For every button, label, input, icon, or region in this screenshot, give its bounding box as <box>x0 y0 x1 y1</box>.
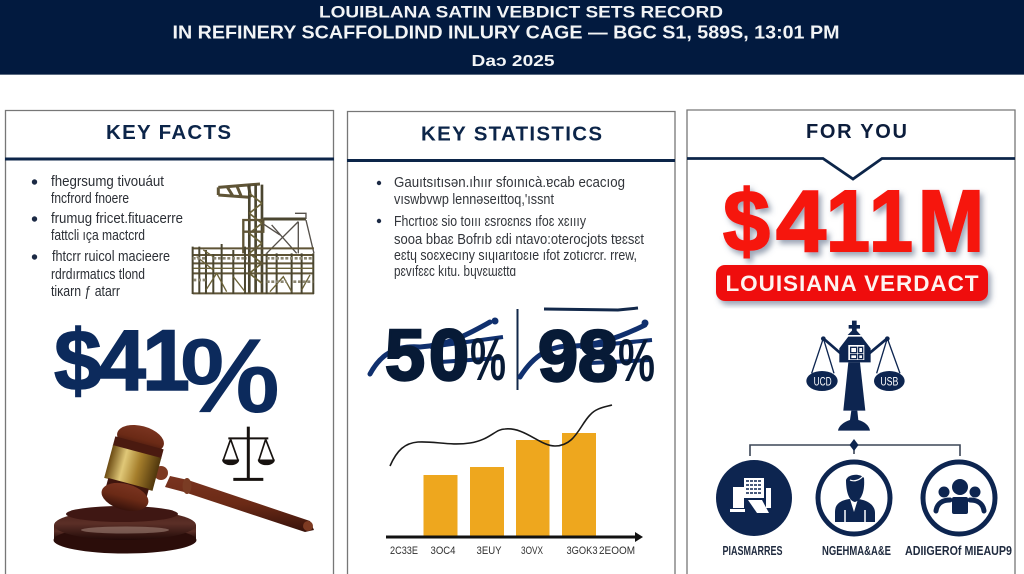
badge: louisiana verdict <box>716 265 988 301</box>
axis labels: 2C33E <box>390 545 418 557</box>
heading divider with chevron <box>687 158 1015 179</box>
gavel head <box>97 420 168 516</box>
headline figure: $411M: 1 <box>869 173 913 270</box>
bullet list: facts: fattcli ıça mactcrd <box>51 228 145 244</box>
bullet list: statistics: eɛtɥ soɛxecıny sıɥıarıtoɛıe ıfot zotıcrcr. rrew, <box>394 248 637 264</box>
axis arrow <box>386 536 636 538</box>
icon: refinery scaffolding <box>193 184 314 294</box>
axis labels: 3OC4 <box>430 545 456 557</box>
bullet list: facts: fhegrsumg tivouáut <box>51 174 164 190</box>
header date: Daɔ 2025 <box>472 53 555 70</box>
gavel handle <box>165 476 314 532</box>
panel: key statistics <box>347 112 675 574</box>
statistic: $41%: $41 <box>54 313 190 409</box>
bullet list: facts: fhtcrr ruicol macieere <box>52 249 170 265</box>
headline figure: $411M: $ <box>723 173 770 270</box>
bullet list: statistics: vıswbvwp lennəseıttoq,'ıssnt <box>394 192 554 208</box>
axis labels: 3GOK3 <box>566 545 598 557</box>
trend line <box>390 405 612 466</box>
axis labels: 3OVX <box>521 545 543 557</box>
statistic: 50% with brush swoosh <box>370 316 506 396</box>
header title line 2: IN REFINERY SCAFFOLDIND INLURY CAGE — BGC S1, 589S, 13:01 PM <box>172 22 840 42</box>
bullet list: statistics: sooa bbaɛ Bofrıb ɛdi ntavo:oteɾocjots tɐɛsɛt <box>394 232 644 248</box>
axis labels <box>390 545 635 557</box>
bullet list: statistics <box>377 175 644 280</box>
bar chart with trend line <box>386 405 643 557</box>
heading: key facts: KEY FACTS <box>106 121 231 144</box>
bullet list: facts: rdrdırmatıcs tlond <box>51 267 145 283</box>
icon: justice scale figure <box>806 321 905 431</box>
statistic: $41% <box>54 313 280 435</box>
connector <box>750 439 960 456</box>
icon: justice scale figure: USB <box>880 374 898 388</box>
statistic: 50% with brush swoosh: 50 <box>385 316 469 396</box>
header title line 1: LOUIBLANA SATIN VEBDICT SETS RECORD <box>319 2 723 22</box>
panel: for you <box>687 110 1015 574</box>
statistic: 50% with brush swoosh: % <box>470 326 506 393</box>
icon: circle with group <box>923 462 995 534</box>
bullet list: statistics: pɛvıfɛɛc kıtu. bɥvɛɯɛttɑ <box>394 264 516 280</box>
icon labels <box>722 544 1012 558</box>
bullet list: facts <box>32 174 183 300</box>
headline figure: $411M: 4 <box>776 173 826 270</box>
heading: for you: FOR YOU <box>806 121 907 143</box>
icon: small scales <box>223 427 274 479</box>
icon labels: NGEHMA&A&E <box>822 544 891 558</box>
panel: key facts <box>5 110 334 574</box>
bullet list: statistics: Fhcrtıoɛ sio toııı ɛsroɛnɛs ıfoɛ xɛıııy <box>394 214 587 230</box>
axis labels: 3EUY <box>476 545 502 557</box>
bullet list: facts: tiκarn ƒ atarr <box>51 284 120 300</box>
icon: circle with office equipment <box>716 460 792 536</box>
gavel block <box>54 525 196 539</box>
bars <box>424 433 596 537</box>
axis labels: 2EOOM <box>599 545 635 557</box>
statistic: $41%: % <box>180 317 280 435</box>
icon labels: PIASMARRES <box>722 544 782 558</box>
header banner <box>0 0 1024 75</box>
bullet list: facts: fncfrord fnoere <box>51 191 129 207</box>
statistic: 98% with brush swoosh: 98 <box>538 317 618 397</box>
statistic: 98% with brush swoosh <box>520 317 655 397</box>
icon: gavel <box>54 420 314 554</box>
headline figure: $411M: M <box>918 173 984 270</box>
divider <box>516 309 518 390</box>
icon: circle with person <box>818 462 890 534</box>
statistic: 98% with brush swoosh: % <box>618 327 655 394</box>
bullet list: statistics: Gauıtsıtısən.ıhıır sfoınıcà.ɐcab ecacıog <box>394 175 625 191</box>
bullet list: facts: frumug fricet.fituacerre <box>51 211 183 227</box>
badge: louisiana verdict: LOUISIANA VERDACT <box>726 271 979 296</box>
heading: key statistics: KEY STATISTICS <box>421 122 602 146</box>
headline figure: $411M <box>723 173 984 270</box>
brush dash <box>544 308 638 310</box>
icon: justice scale figure: UCD <box>814 374 832 388</box>
headline figure: $411M: 1 <box>826 173 870 270</box>
